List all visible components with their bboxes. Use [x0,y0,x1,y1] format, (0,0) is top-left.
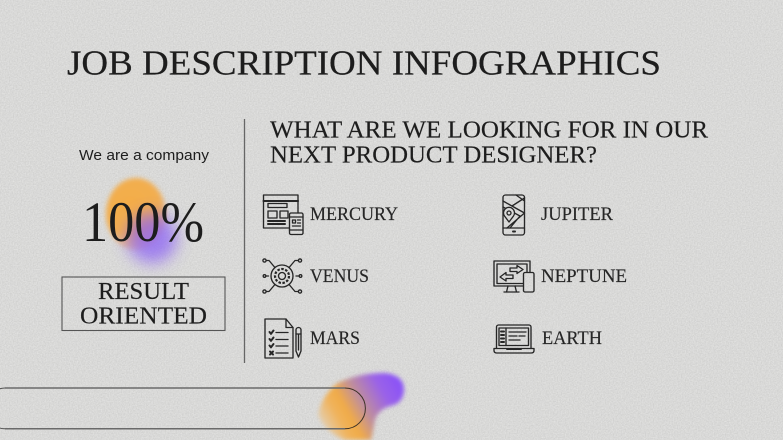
gradient blob behind number [106,178,177,263]
label: MERCURY [310,205,398,225]
decorative gradient blob, bottom [318,373,404,440]
label: VENUS [310,267,369,287]
panel: company claim [62,147,225,330]
big number: 100% [82,191,204,254]
icon: checklist and pen [265,319,301,358]
item: Jupiter [503,195,614,235]
icon: phone with map pin [503,195,524,235]
outlined label box: RESULT [98,279,189,305]
label: NEPTUNE [541,267,627,287]
item: Earth [494,325,602,353]
outlined label box [62,277,225,330]
item: Neptune [494,261,627,292]
outlined label box: ORIENTED [80,304,207,330]
item: Venus [263,259,369,293]
icon: laptop with code [494,325,534,353]
icon: web layout on desktop and mobile [264,195,303,234]
icon: gear with network nodes [263,259,302,293]
title: JOB DESCRIPTION INFOGRAPHICS [67,44,661,82]
heading: question: NEXT PRODUCT DESIGNER? [270,142,597,168]
label: EARTH [542,329,602,349]
intro text: We are a company [79,147,210,164]
icon: monitor and phone sync [494,261,534,292]
label: MARS [310,329,360,349]
vertical divider [244,119,246,363]
item: Mars [265,319,360,358]
item: Mercury [264,195,398,234]
label: JUPITER [541,205,614,225]
rounded outline bar [0,388,365,429]
heading: question [270,116,709,168]
heading: question: WHAT ARE WE LOOKING FOR IN OUR [270,116,709,144]
